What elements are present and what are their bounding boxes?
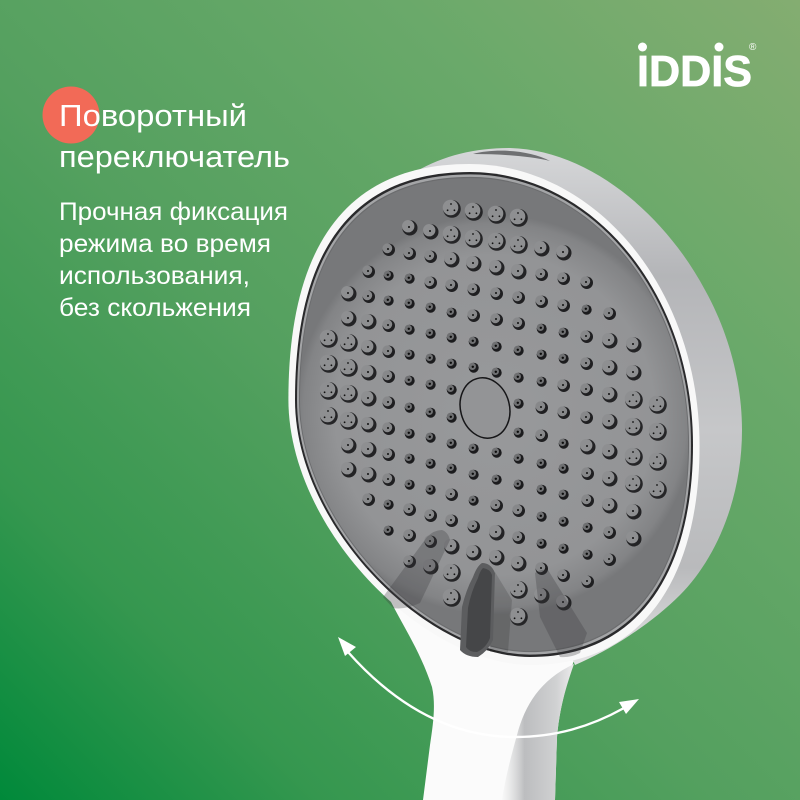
- logo: iddis: ®: [749, 42, 757, 53]
- description text: [59, 198, 288, 322]
- shower handle: [385, 590, 574, 800]
- ghost switch left position: [383, 530, 450, 608]
- inner groove: [299, 177, 689, 652]
- accent circle: [42, 86, 100, 144]
- description text: Прочная фиксация: [59, 198, 288, 226]
- spray face: [300, 178, 688, 651]
- switch shadow: [490, 572, 512, 652]
- ghost switch right position: [535, 570, 587, 657]
- description text: использования,: [59, 262, 250, 290]
- dark inner rim: [295, 172, 693, 657]
- heading: [59, 98, 290, 174]
- rotation arrow: [338, 637, 639, 737]
- heading: Поворотный: [59, 98, 247, 133]
- shower head body: [415, 148, 742, 665]
- description text: режима во время: [59, 230, 271, 258]
- white rim: [288, 164, 700, 665]
- logo: iddis: IDDIS: [637, 47, 752, 96]
- top slot of dial: [473, 151, 550, 161]
- rotary switch: [460, 563, 495, 657]
- description text: без скольжения: [59, 294, 251, 322]
- nozzles: [320, 200, 667, 626]
- center button: [453, 372, 517, 444]
- heading: переключатель: [59, 139, 290, 174]
- silver bevel: [297, 174, 691, 655]
